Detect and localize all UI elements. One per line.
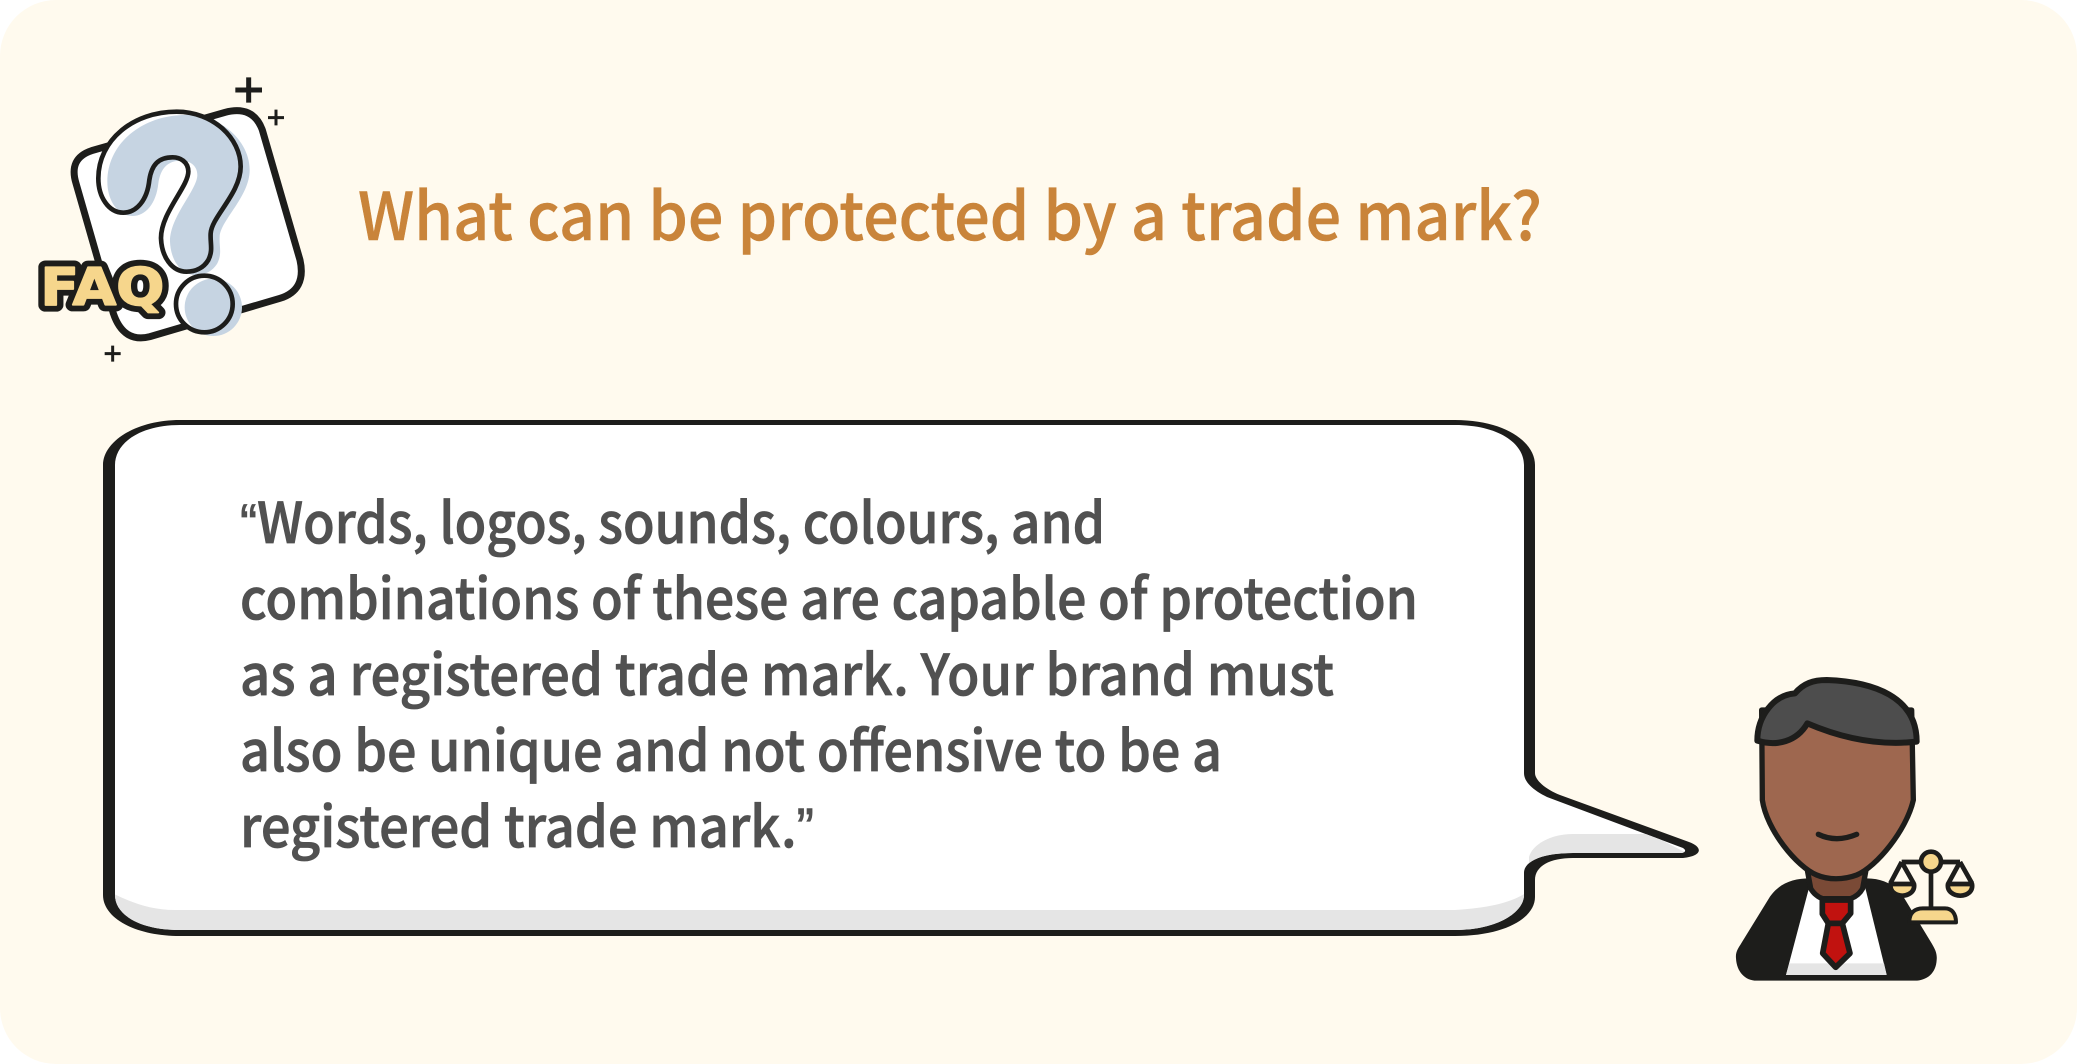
icon: question mark xyxy=(98,112,250,275)
quote line 3: as a registered trade mark. Your brand must xyxy=(240,631,1334,712)
sparkle: small plus lower xyxy=(105,346,121,362)
title: What can be protected by a trade mark? xyxy=(358,164,1542,260)
bubble outline xyxy=(103,420,1699,936)
FAQ badge text: FAQ xyxy=(40,258,164,318)
sparkle: small plus xyxy=(268,110,284,125)
quote line 4: also be unique and not offensive to be a xyxy=(240,707,1222,788)
shirt shadow xyxy=(1786,963,1887,975)
quote line 5: registered trade mark.” xyxy=(240,783,814,864)
lawyer face xyxy=(1762,710,1913,879)
FAQ badge text: FAQ xyxy=(40,258,164,318)
icon: lawyer with scales xyxy=(1736,680,1972,981)
icon: scales of justice xyxy=(1890,852,1972,922)
lawyer jacket xyxy=(1736,878,1937,981)
lawyer mouth xyxy=(1818,834,1857,839)
quote line 1: “Words, logos, sounds, colours, and xyxy=(240,479,1105,560)
icon: tilted card xyxy=(74,111,301,338)
lawyer neck xyxy=(1807,870,1866,899)
bubble fill xyxy=(115,425,1685,930)
quote text xyxy=(240,479,1418,864)
lawyer tie xyxy=(1822,900,1851,967)
lawyer hair xyxy=(1757,680,1917,743)
icon: FAQ question mark xyxy=(40,77,301,362)
bubble shadow band xyxy=(115,834,1684,930)
lawyer shirt xyxy=(1786,887,1887,975)
quote line 2: combinations of these are capable of protection xyxy=(240,555,1418,636)
speech bubble xyxy=(103,420,1700,940)
icon: question mark dot xyxy=(176,276,242,336)
sparkle: large plus xyxy=(235,77,262,103)
